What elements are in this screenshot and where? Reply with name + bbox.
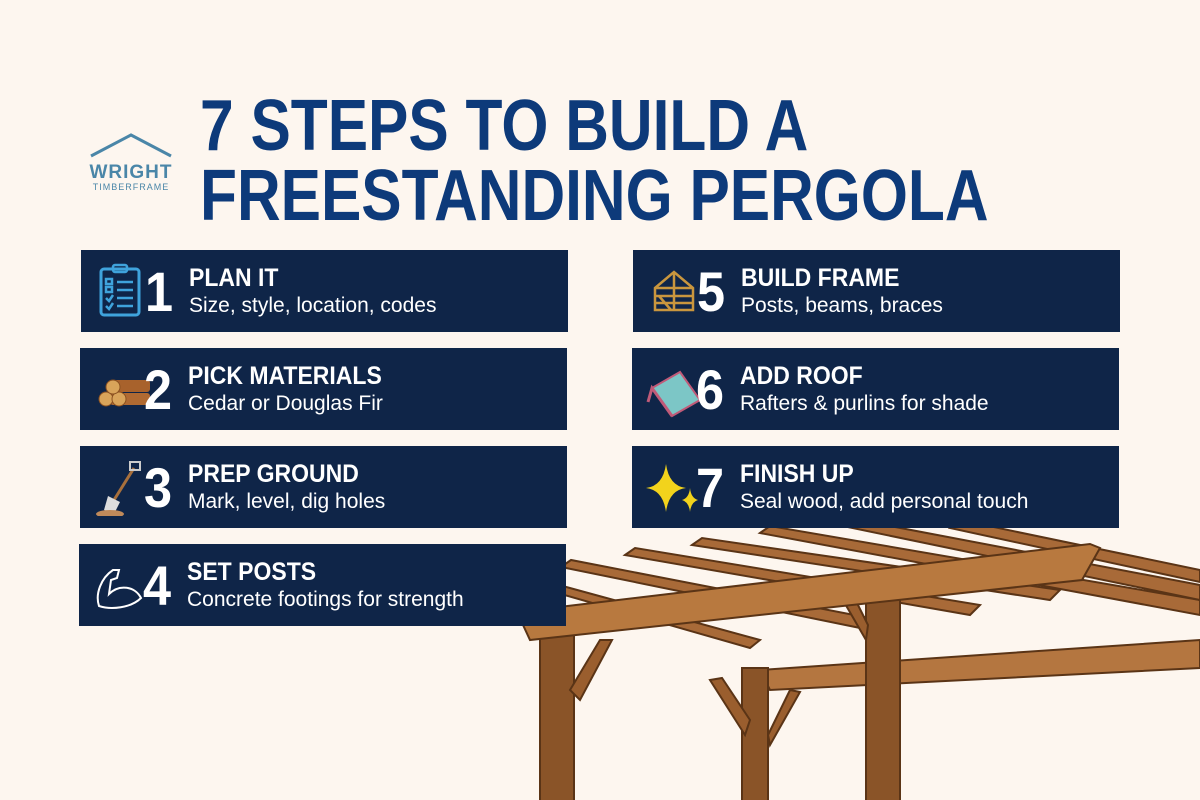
rafters (505, 573, 760, 648)
step 3: Mark, level, dig holes (188, 490, 385, 513)
step 2: Cedar or Douglas Fir (188, 392, 383, 415)
posts (540, 632, 574, 800)
step 6 (632, 348, 1119, 430)
title: FREESTANDING PERGOLA (200, 156, 989, 236)
step 2: 2 (144, 358, 172, 421)
step 7: 7 (696, 456, 724, 519)
step 4 (79, 544, 566, 626)
icon: roof (646, 370, 700, 418)
step 5 (633, 250, 1120, 332)
step 4: 4 (143, 554, 171, 617)
step 5: BUILD FRAME (741, 264, 899, 292)
icon: logs (98, 380, 150, 406)
step 1: 1 (145, 260, 173, 323)
step 6: 6 (696, 358, 724, 421)
icon: flexed arm (96, 569, 142, 609)
icon: sparkles (646, 464, 698, 512)
step 3: 3 (144, 456, 172, 519)
step 4: SET POSTS (187, 558, 316, 586)
icon: shovel (96, 461, 141, 516)
icon: timber frame (654, 270, 694, 312)
step 5: Posts, beams, braces (741, 294, 943, 317)
logo (89, 133, 173, 190)
step 1: PLAN IT (189, 264, 278, 292)
step 4: Concrete footings for strength (187, 588, 464, 611)
icon: clipboard (100, 264, 140, 316)
step 5: 5 (697, 260, 725, 323)
step 3 (80, 446, 567, 528)
step 7: FINISH UP (740, 460, 854, 488)
step 2: PICK MATERIALS (188, 362, 382, 390)
step 6: ADD ROOF (740, 362, 863, 390)
braces (570, 640, 612, 700)
side beam (760, 640, 1200, 690)
step 7: Seal wood, add personal touch (740, 490, 1028, 513)
logo: WRIGHT (89, 162, 173, 183)
title: 7 STEPS TO BUILD A (200, 86, 808, 166)
step 6: Rafters & purlins for shade (740, 392, 989, 415)
step 3: PREP GROUND (188, 460, 359, 488)
step 1 (81, 250, 568, 332)
step 1: Size, style, location, codes (189, 294, 436, 317)
front beam (517, 544, 1100, 640)
title (200, 86, 989, 236)
step 7 (632, 446, 1119, 528)
step 2 (80, 348, 567, 430)
